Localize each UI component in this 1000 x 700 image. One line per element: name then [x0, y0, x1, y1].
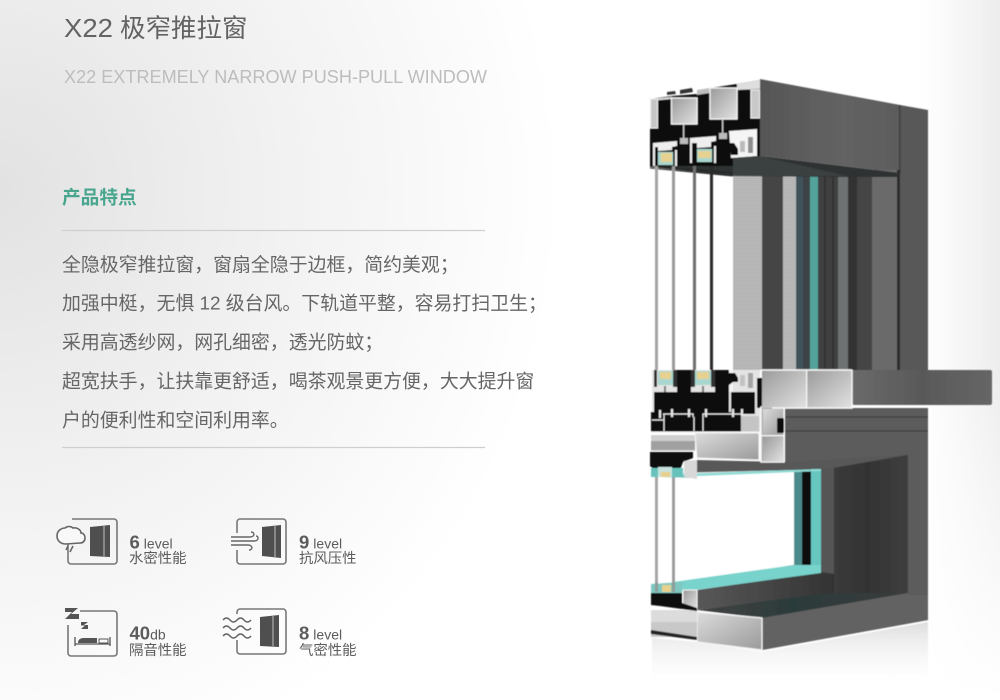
sill board end [852, 370, 992, 405]
lower base profile [651, 582, 762, 650]
stile profile [761, 407, 784, 462]
head section profile [650, 80, 760, 166]
head frame outer face [760, 79, 900, 173]
text block: product feature list: 超宽扶手，让扶靠更舒适，喝茶观景更方便，大大提升窗 [62, 370, 534, 392]
lintel underside [697, 455, 908, 479]
rating text [299, 622, 357, 659]
heading: product features: 产品特点 [62, 187, 137, 208]
performance: sound insulation [65, 608, 187, 659]
lower glass pane [655, 469, 821, 592]
floor reflection [652, 622, 928, 690]
glass panes, upper [655, 165, 713, 371]
icon: air waves with window [223, 609, 286, 654]
right weather seal profile [729, 129, 757, 158]
rating text [129, 532, 187, 567]
rating text: 40db [130, 622, 166, 644]
sill board profile [761, 370, 852, 408]
glazing unit right [690, 136, 716, 163]
lower opening sill reveal [697, 572, 834, 610]
icon: cloud and rain with window [57, 519, 117, 564]
rating text [129, 622, 187, 659]
performance: wind pressure resistance [231, 519, 357, 567]
rating text: 9 level [299, 532, 342, 552]
glazing unit left [653, 141, 677, 166]
lintel glazing section [650, 452, 697, 479]
lower opening floor [697, 593, 908, 618]
rating text: 6 level [130, 532, 173, 552]
icon: wind with window [231, 519, 286, 564]
rating text [299, 532, 357, 567]
window cross-section illustration [650, 79, 992, 690]
title: X22 [64, 15, 113, 43]
lower base outer dark face [762, 593, 928, 650]
lower frame grooves [785, 417, 928, 431]
rating text: 抗风压性 [299, 550, 357, 567]
rating text: 气密性能 [299, 642, 357, 659]
lower opening left reveal [820, 460, 834, 576]
title [64, 15, 248, 43]
upper window reveal with fly screen and glass [733, 170, 900, 370]
text block: product feature list: 全隐极窄推拉窗，窗扇全隐于边框，简约美观； [62, 254, 459, 276]
performance: air tightness [223, 609, 357, 659]
text block: product feature list: 户的便利性和空间利用率。 [62, 410, 289, 432]
icon: bed and noise symbol [65, 608, 117, 656]
lower frame dark face [762, 408, 928, 650]
rating text: 水密性能 [129, 550, 187, 567]
head soffit [650, 156, 900, 177]
lower opening back wall [828, 455, 908, 594]
mid rail section [651, 370, 762, 460]
subtitle: X22 EXTREMELY NARROW PUSH-PULL WINDOW [64, 67, 487, 87]
rating text: 8 level [299, 622, 342, 644]
text block: product feature list [62, 254, 547, 432]
text block: product feature list: 加强中梃，无惧 12 级台风。下轨道平整，容易打扫卫生； [62, 292, 547, 314]
title: 极窄推拉窗 [120, 15, 248, 43]
rating text: 隔音性能 [129, 642, 187, 659]
text block: product feature list: 采用高透纱网，网孔细密，透光防蚊； [62, 332, 383, 354]
right frame post [900, 105, 928, 370]
performance: water tightness [57, 519, 187, 567]
